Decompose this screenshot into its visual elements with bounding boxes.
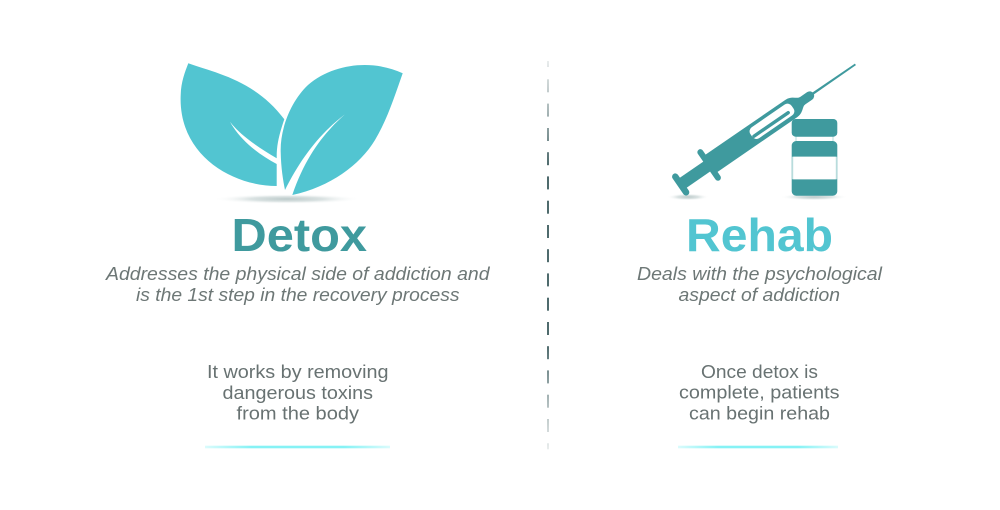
heading: Detox: Detox	[232, 209, 367, 261]
text block: rehab description: Deals with the psychological	[637, 264, 883, 284]
text block: how detox works: from the body	[236, 404, 359, 424]
text block: detox description: Addresses the physical side of addiction and	[105, 264, 491, 284]
text block: when rehab begins	[679, 362, 840, 424]
text block: when rehab begins: complete, patients	[679, 382, 840, 402]
text block: when rehab begins: Once detox is	[701, 362, 818, 382]
icon: leaves	[181, 63, 403, 204]
text block: detox description	[105, 264, 491, 305]
underline: detox	[205, 446, 390, 448]
text block: rehab description: aspect of addiction	[678, 285, 840, 305]
icon: vial	[780, 119, 848, 200]
text block: when rehab begins: can begin rehab	[689, 404, 830, 424]
text block: detox description: is the 1st step in the recovery process	[136, 285, 460, 305]
text block: how detox works: It works by removing	[207, 362, 388, 382]
divider: dashed line	[547, 61, 549, 449]
icon: syringe	[667, 52, 864, 201]
text block: how detox works: dangerous toxins	[222, 383, 373, 403]
underline: rehab	[678, 446, 838, 448]
heading: Rehab: Rehab	[686, 209, 833, 261]
text block: rehab description	[637, 264, 883, 305]
text block: how detox works	[207, 362, 388, 424]
